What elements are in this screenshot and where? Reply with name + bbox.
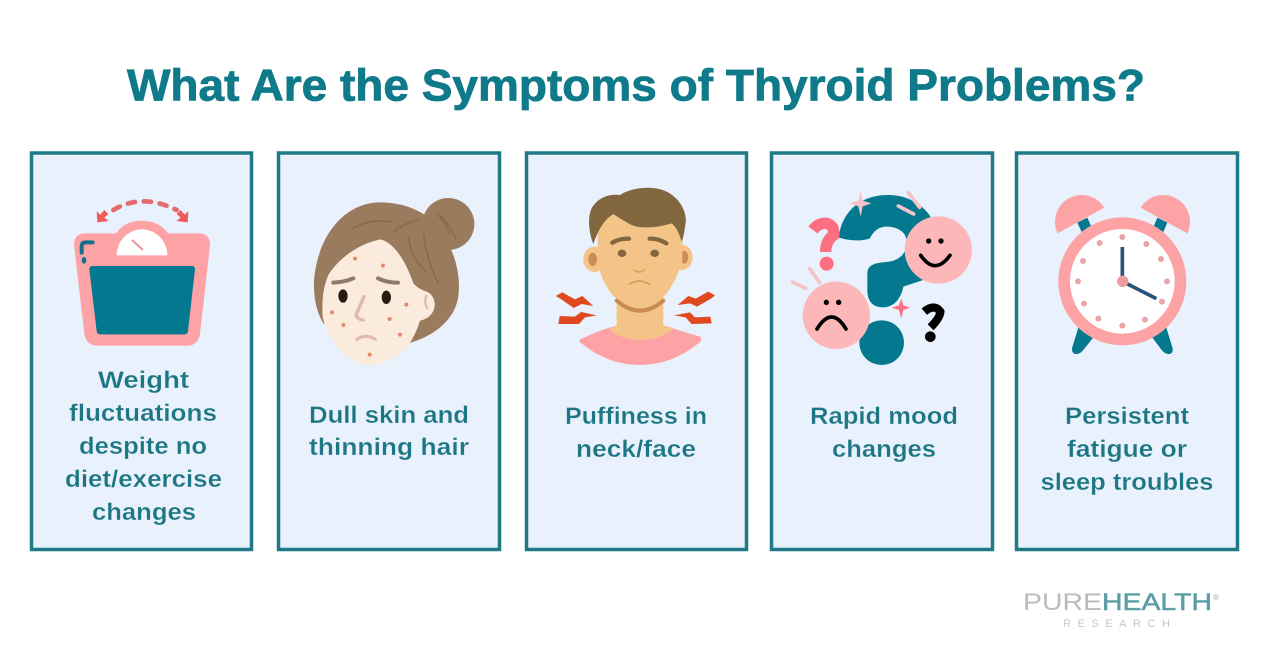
logo: RESEARCH bbox=[1063, 618, 1170, 630]
label: mood: Rapid mood bbox=[810, 403, 958, 430]
logo: HEALTH bbox=[1102, 589, 1212, 616]
panel: dull skin bbox=[278, 153, 500, 550]
title: What Are the Symptoms of Thyroid Problems? bbox=[127, 62, 1145, 110]
panel: mood changes bbox=[772, 153, 992, 550]
label: dull skin: thinning hair bbox=[309, 434, 469, 461]
label: weight: fluctuations bbox=[69, 400, 217, 427]
icon: weighing scale bbox=[74, 201, 210, 346]
panel: weight fluctuations bbox=[32, 153, 252, 550]
panel: fatigue bbox=[1016, 153, 1238, 550]
label: puffiness bbox=[565, 403, 707, 463]
label: fatigue bbox=[1040, 403, 1214, 496]
label: weight: diet/exercise bbox=[65, 466, 222, 493]
label: dull skin: Dull skin and bbox=[309, 402, 469, 429]
logo: ® bbox=[1213, 593, 1219, 602]
label: fatigue: Persistent bbox=[1065, 403, 1189, 430]
label: dull skin bbox=[309, 402, 469, 461]
label: mood bbox=[810, 403, 958, 463]
panel: puffiness bbox=[526, 153, 746, 550]
label: fatigue: sleep troubles bbox=[1040, 469, 1214, 496]
label: puffiness: neck/face bbox=[576, 436, 696, 463]
icon: woman with blemished skin bbox=[314, 198, 474, 365]
icon: alarm clock bbox=[1055, 195, 1190, 354]
label: puffiness: Puffiness in bbox=[565, 403, 707, 430]
label: weight bbox=[65, 367, 222, 526]
label: weight: Weight bbox=[98, 367, 189, 394]
icon: man with swollen neck bbox=[556, 188, 715, 365]
label: weight: despite no bbox=[79, 433, 207, 460]
logo bbox=[1023, 589, 1219, 630]
label: fatigue: fatigue or bbox=[1067, 436, 1187, 463]
logo: PURE bbox=[1023, 589, 1102, 616]
label: mood: changes bbox=[832, 436, 936, 463]
label: weight: changes bbox=[92, 499, 196, 526]
icon: question mark with faces bbox=[792, 192, 972, 365]
